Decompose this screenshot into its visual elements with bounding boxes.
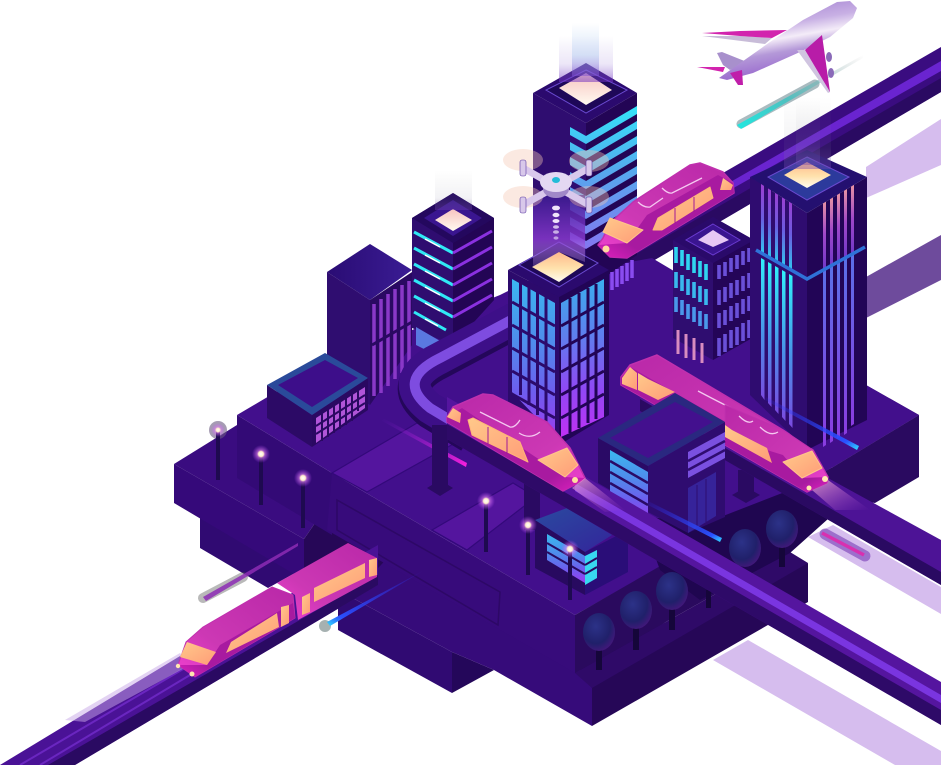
main tower windows left	[512, 279, 555, 437]
neon streak: blue at right tower foot	[765, 397, 859, 450]
deck tiles	[332, 423, 536, 550]
train front car	[178, 587, 295, 677]
airplane fuselage	[719, 1, 857, 80]
tower roof	[412, 193, 494, 243]
train windscreen	[783, 451, 822, 478]
drone scan beam	[533, 195, 585, 268]
neon streak: blue under train	[319, 571, 423, 632]
airplane far wing	[702, 30, 787, 44]
rail: train three track	[640, 375, 941, 585]
rail: main straight track	[447, 397, 941, 725]
ground shadow stripes	[713, 119, 941, 765]
building: small front block	[535, 508, 628, 595]
right tower bars lower	[761, 254, 854, 447]
train windows	[468, 418, 528, 462]
train roof hatches	[638, 178, 702, 207]
street lamps	[209, 421, 579, 600]
neon streak: pink left	[203, 543, 298, 601]
tower lower windows	[416, 327, 447, 352]
train headlight trail	[812, 480, 870, 510]
tower floor highlights	[425, 239, 440, 326]
train headlights	[176, 664, 194, 676]
building: main front tower	[508, 242, 609, 445]
train rear	[622, 367, 637, 390]
right tower bars upper	[761, 182, 854, 270]
airplane contrail	[737, 55, 863, 129]
deck: main top surface	[237, 258, 919, 615]
tower light beam	[435, 170, 472, 210]
airplane tail plane	[697, 67, 725, 72]
block: dark back tree bay	[640, 490, 838, 600]
trees: back row	[706, 510, 798, 608]
train windscreen	[603, 218, 643, 243]
train headlights	[806, 476, 828, 490]
block: main front face	[327, 473, 575, 673]
low block stripes right	[688, 432, 725, 478]
train nose redraw over tower foot	[725, 405, 828, 492]
mid tower bars left	[676, 247, 706, 363]
right tower band	[756, 247, 865, 279]
tower floor lights	[414, 231, 492, 330]
building: dark back block	[327, 244, 412, 405]
train lower body	[598, 175, 734, 258]
train roof hatches	[480, 412, 540, 436]
right tower roof	[750, 150, 867, 213]
building: right tall tower	[750, 97, 867, 450]
airplane	[697, 1, 857, 93]
rail: lower left track	[0, 545, 378, 765]
airplane near wing	[797, 35, 830, 93]
block: lower left layer	[200, 515, 304, 588]
neon streak: blue by low block	[648, 501, 722, 542]
building: stacked floors tower	[412, 170, 494, 352]
block: upper left wall	[237, 415, 332, 535]
airplane engines	[826, 52, 834, 78]
building: low front block	[598, 393, 725, 533]
low block door	[688, 472, 716, 533]
train headlight trail	[572, 478, 625, 512]
platform: stacked base blocks	[174, 258, 919, 726]
drone arms	[523, 168, 589, 205]
building: low left block	[267, 353, 368, 447]
centre tower window stripes	[570, 106, 637, 249]
trees: front row	[583, 572, 688, 670]
block: left lamp ledge	[174, 425, 400, 580]
train roof hatches	[698, 391, 778, 434]
train: right front	[621, 355, 870, 510]
neon streak: magenta on deck	[382, 418, 467, 467]
mid tower bars right	[719, 248, 749, 356]
train rear	[447, 408, 461, 423]
train lower body	[447, 408, 585, 491]
train: lower left	[176, 543, 377, 677]
lamp lights	[211, 423, 579, 558]
main tower roof	[508, 242, 609, 297]
airplane lower tail	[730, 70, 743, 85]
train light trail	[65, 653, 190, 722]
rail: curved elevated track	[415, 318, 515, 436]
low left block windows	[316, 387, 365, 443]
train rear car	[277, 543, 377, 620]
right tower light beam	[784, 97, 831, 169]
lamp halo	[209, 421, 227, 439]
drone motors	[520, 160, 592, 213]
tower body	[412, 193, 494, 345]
train rear window	[720, 178, 733, 190]
lower window panel	[612, 260, 632, 290]
low block roof	[598, 393, 725, 466]
building: mid right tower	[673, 217, 754, 363]
drone hub	[540, 172, 572, 198]
mid tower roof	[673, 217, 754, 263]
block: right platform	[700, 360, 919, 503]
block: lower right ledge	[575, 552, 808, 688]
airplane tail fin	[717, 52, 747, 70]
train windows	[725, 425, 772, 463]
train: centre on curve	[447, 394, 625, 512]
block: lowest front layer	[338, 530, 808, 726]
block: front right face	[575, 553, 790, 673]
neon streak: pink far right	[822, 533, 865, 556]
train headlight	[602, 246, 610, 252]
train windscreen	[538, 448, 578, 477]
train headlight	[572, 477, 578, 483]
low block stripes left	[610, 450, 648, 520]
centre tower roof	[533, 63, 637, 123]
train windows	[653, 187, 713, 230]
building: tall centre tower	[533, 23, 637, 300]
drone	[503, 149, 609, 240]
train: upper	[598, 163, 734, 258]
drone rotors	[503, 149, 609, 208]
centre tower light beam	[559, 23, 613, 82]
rail supports	[427, 425, 760, 530]
drone signal dots	[552, 206, 560, 240]
main tower windows right	[561, 279, 604, 437]
train lower body	[621, 368, 828, 492]
rail: upper right elevated track	[600, 47, 941, 292]
lamp poles	[218, 430, 570, 600]
